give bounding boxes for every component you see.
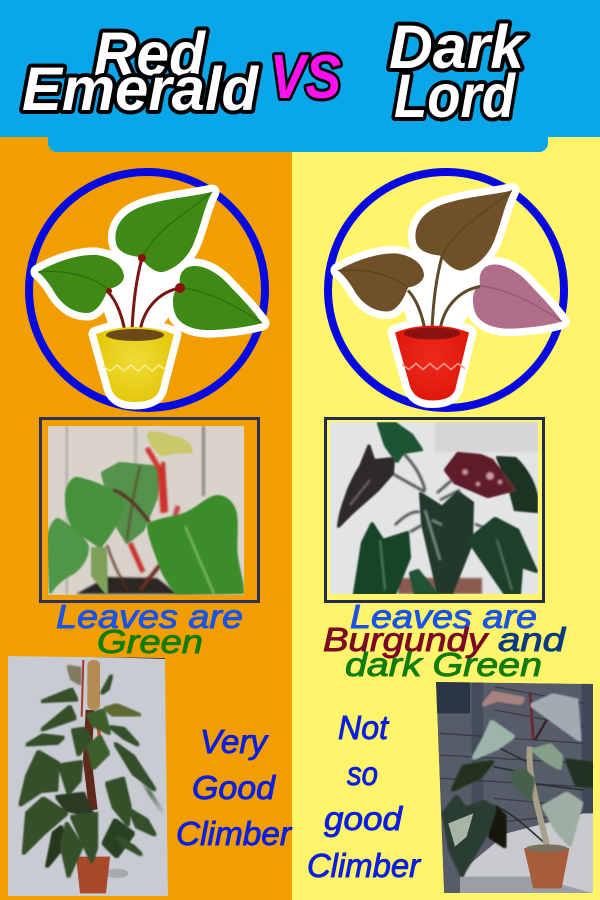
text: leaves are burgundy and dark green: Leaves are — [350, 598, 537, 635]
text: very good climber: Climber — [176, 815, 293, 852]
photo: red emerald climbing on moss pole — [8, 654, 168, 896]
icon: blue ring left — [29, 172, 265, 408]
text: leaves are burgundy and dark green: dark Green — [345, 646, 542, 683]
icon: green plant in yellow pot — [38, 192, 262, 402]
title: Dark Lord: Lord — [394, 62, 517, 130]
panel: red emerald background — [0, 130, 292, 900]
text: very good climber — [176, 723, 293, 852]
text: leaves are burgundy and dark green — [323, 598, 567, 683]
text: very good climber: Very — [200, 723, 270, 760]
title: VS: VS — [270, 43, 341, 112]
header banner — [0, 0, 600, 152]
icon: blue ring right — [328, 172, 564, 408]
text: not so good climber: Climber — [307, 847, 422, 884]
text: leaves are burgundy and dark green: Burgundy — [323, 621, 490, 658]
photo: red emerald leaves — [40, 418, 258, 602]
text: leaves are burgundy and dark green: and — [498, 621, 567, 658]
icon: brown plant in red pot — [338, 190, 562, 400]
title: Red Emerald: Red — [94, 20, 207, 88]
title: Dark Lord — [389, 13, 527, 130]
text: not so good climber: Not — [338, 709, 390, 746]
title: Red Emerald: Emerald — [22, 55, 260, 123]
text: leaves are green: Green — [97, 623, 203, 660]
title: Red Emerald — [22, 20, 260, 123]
text: leaves are green — [56, 598, 243, 660]
title: Dark Lord: Dark — [389, 13, 527, 81]
text: very good climber: Good — [192, 769, 277, 806]
text: leaves are green: Leaves are — [56, 598, 243, 635]
text: not so good climber: good — [324, 800, 404, 837]
text: not so good climber — [307, 709, 422, 884]
text: not so good climber: so — [347, 755, 378, 792]
photo: dark lord on porch — [435, 680, 593, 893]
photo: dark lord leaves — [326, 418, 544, 602]
panel: dark lord background — [292, 130, 600, 900]
